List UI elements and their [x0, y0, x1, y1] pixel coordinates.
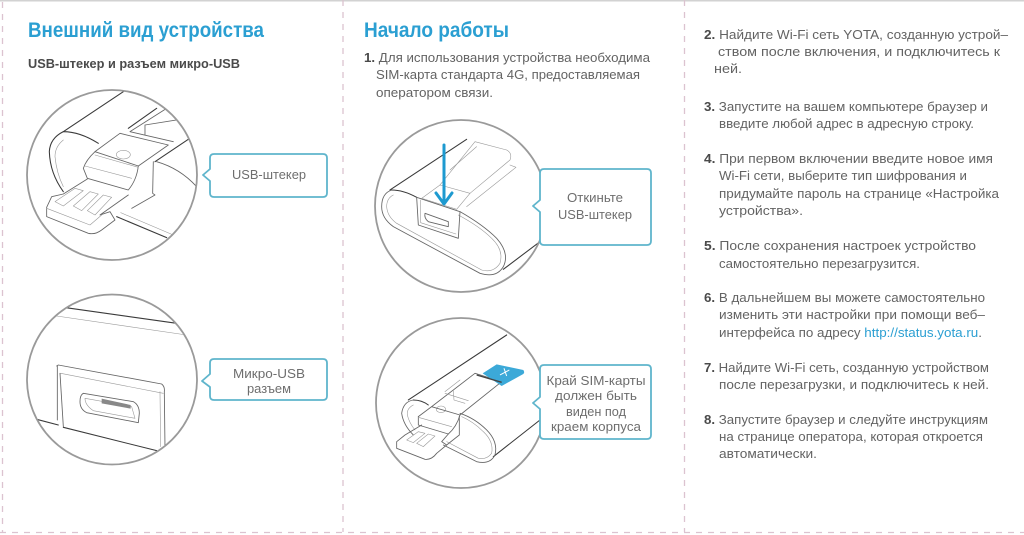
step 5: самостоятельно перезагрузится. [719, 257, 920, 271]
step 4: устройства». [719, 204, 803, 218]
illustration: fold back USB plug [375, 120, 547, 292]
step 5: 5. После сохранения настроек устройство [704, 239, 976, 253]
illustration: USB plug in circle [27, 90, 197, 260]
title: device appearance: Внешний вид устройства [28, 19, 264, 42]
step 8: на странице оператора, которая откроется [719, 430, 983, 444]
step 4: Wi-Fi сети, выберите тип шифрования и [719, 169, 967, 183]
step 1 text: SIM-карта стандарта 4G, предоставляемая [376, 68, 640, 82]
step 4: придумайте пароль на странице «Настройка [719, 187, 999, 201]
step 7: 7. Найдите Wi-Fi сеть, созданную устройством [704, 361, 989, 375]
panel: steps 2 to 8 [704, 28, 1008, 461]
callout: fold back USB plug [533, 169, 651, 245]
step 7: после перезагрузки, и подключитесь к ней. [719, 378, 989, 392]
callout: micro-USB port: разъем [247, 381, 291, 396]
step 1 text: оператором связи. [376, 86, 493, 100]
step 8: 8. Запустите браузер и следуйте инструкциям [704, 413, 988, 427]
callout: fold back USB plug: USB-штекер [558, 207, 632, 222]
step 8: автоматически. [719, 447, 817, 461]
step 4: 4. При первом включении введите новое имя [704, 152, 993, 166]
step 8 [704, 413, 988, 461]
callout: SIM card edge: должен быть [555, 388, 637, 403]
callout: SIM card edge: Край SIM-карты [546, 373, 646, 388]
step 7 [704, 361, 989, 392]
illustration: SIM card insertion [376, 318, 546, 488]
step 1 text [364, 51, 650, 100]
step 6: интерфейса по адресу http://status.yota.ru . [719, 326, 982, 340]
callout: micro-USB port: Микро-USB [233, 366, 305, 381]
subheading: USB plug and micro-USB: USB-штекер и разъем микро-USB [28, 57, 240, 71]
step 6: изменить эти настройки при помощи веб– [719, 308, 985, 322]
panel: getting started [364, 19, 651, 488]
step 1 text: 1. Для использования устройства необходима [364, 51, 650, 65]
callout: SIM card edge: краем корпуса [551, 419, 642, 434]
step 2: ней. [714, 62, 742, 76]
icon: blue down arrow [436, 145, 452, 204]
step 2 [704, 28, 1008, 76]
panel: device appearance [27, 19, 327, 464]
callout: SIM card edge: виден под [566, 404, 626, 419]
callout: micro-USB port [202, 359, 327, 400]
step 6 [704, 291, 985, 340]
step 6: 6. В дальнейшем вы можете самостоятельно [704, 291, 985, 305]
callout: USB plug: USB-штекер [232, 167, 306, 182]
step 5 [704, 239, 976, 271]
illustration: micro-USB port in circle [27, 294, 197, 464]
step 3: введите любой адрес в адресную строку. [719, 117, 974, 131]
callout: USB plug [203, 154, 327, 197]
step 2: ством после включения, и подключитесь к [718, 45, 1001, 59]
step 3: 3. Запустите на вашем компьютере браузер и [704, 100, 988, 114]
callout: fold back USB plug: Откиньте [567, 190, 623, 205]
step 4 [704, 152, 999, 218]
callout: SIM card edge [533, 365, 651, 439]
step 2: 2. Найдите Wi-Fi сеть YOTA, созданную устрой– [704, 28, 1008, 42]
title: getting started: Начало работы [364, 19, 509, 42]
step 3 [704, 100, 988, 131]
